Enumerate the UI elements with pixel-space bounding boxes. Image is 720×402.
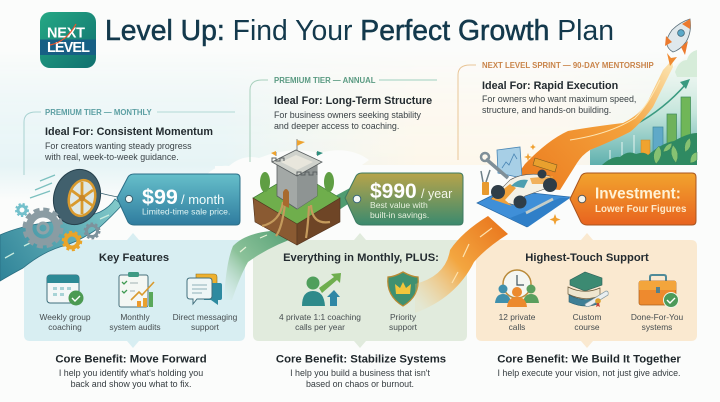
price tag: annual: / year — [421, 187, 452, 201]
icon: shield with crown — [388, 272, 418, 306]
growth scene: bars, arrow, foliage — [590, 48, 697, 165]
icon: castle on land block — [253, 139, 340, 245]
label: private coaching calls: 4 private 1:1 coaching — [279, 312, 361, 322]
icon: rocket — [665, 19, 690, 55]
panel: monthly header: with real, week-to-week guidance. — [44, 152, 179, 162]
icon: clipboard audit chart — [119, 272, 154, 307]
logo — [40, 12, 96, 68]
icon: race car workshop — [477, 144, 570, 227]
road: orange upper — [510, 53, 677, 190]
icon: person with growth arrow — [302, 273, 341, 306]
white cloud behind castle — [205, 150, 697, 182]
icon: briefcase with check — [639, 275, 678, 308]
core benefit: we build it together — [497, 354, 681, 378]
panel: sprint header: Ideal For: Rapid Execution — [482, 80, 618, 92]
panel: monthly header: Ideal For: Consistent Momentum — [45, 126, 213, 138]
core benefit: stabilize systems: I help you build a business that isn't — [290, 368, 430, 378]
icon: gears — [16, 204, 100, 250]
road: orange lower — [415, 216, 508, 313]
price tag: annual: $990 — [370, 180, 417, 203]
core benefit: we build it together: Core Benefit: We Build It Together — [497, 354, 681, 366]
label: custom course: course — [574, 322, 600, 332]
icon: clock with people — [495, 270, 539, 307]
panel: annual header — [250, 76, 437, 162]
panel: annual header: PREMIUM TIER — ANNUAL — [274, 76, 376, 85]
core benefit: stabilize systems: based on chaos or burnout. — [306, 379, 414, 389]
label: private calls: calls — [509, 322, 525, 332]
price tag: annual — [345, 173, 463, 225]
label: monthly system audits: Monthly — [120, 312, 150, 322]
label: monthly system audits: system audits — [109, 322, 161, 332]
core benefit: move forward: I help you identify what's holding you — [59, 368, 203, 378]
label: direct messaging support: Direct messaging — [173, 312, 237, 322]
price tag: investment: Lower Four Figures — [595, 204, 687, 215]
label: private calls: 12 private — [499, 312, 535, 322]
label: done-for-you systems: Done-For-You — [631, 312, 683, 322]
core benefit: stabilize systems — [276, 354, 446, 389]
core benefit: move forward: back and show you what to fix. — [71, 379, 191, 389]
panel: annual header: Ideal For: Long-Term Structure — [274, 95, 432, 107]
panel: annual header: and deeper access to coaching. — [274, 121, 399, 131]
label: priority support: Priority — [390, 312, 416, 322]
panel: highest-touch support — [476, 233, 697, 348]
panel: monthly header — [24, 108, 235, 175]
price tag: annual: built-in savings. — [370, 210, 429, 220]
panel: sprint header: NEXT LEVEL SPRINT — 90-DAY MENTORSHIP — [482, 61, 654, 70]
label: priority support: support — [389, 322, 418, 332]
left wash fade — [0, 166, 215, 200]
panel: key features — [24, 233, 245, 348]
road: green — [224, 188, 354, 300]
label: weekly group coaching: coaching — [48, 322, 82, 332]
panel: sprint header: structure, and hands-on building. — [482, 105, 611, 115]
icon: tire wheel — [30, 163, 126, 231]
price tag: investment — [570, 173, 696, 225]
panel: monthly header: PREMIUM TIER — MONTHLY — [45, 108, 153, 117]
background wash band — [0, 83, 636, 166]
price tag: monthly: Limited-time sale price. — [142, 206, 230, 216]
logo: LEVEL — [47, 40, 90, 56]
panel: everything in monthly plus — [253, 233, 467, 348]
label: private coaching calls: calls per year — [295, 322, 345, 332]
heading: key features: Key Features — [99, 252, 169, 264]
core benefit: we build it together: I help execute your vision, not just give advice. — [497, 368, 681, 378]
price tag: investment: Investment: — [595, 186, 681, 202]
label: direct messaging support: support — [191, 322, 220, 332]
label: custom course: Custom — [573, 312, 601, 322]
price tag: annual: Best value with — [370, 200, 428, 210]
label: done-for-you systems: systems — [642, 322, 672, 332]
price tag: monthly: $99 — [142, 185, 178, 209]
label: weekly group coaching: Weekly group — [39, 312, 91, 322]
heading: everything in monthly plus: Everything in Monthly, PLUS: — [283, 252, 439, 264]
panel: monthly header: For creators wanting steady progress — [45, 141, 192, 151]
heading: highest-touch support: Highest-Touch Support — [525, 252, 649, 264]
panel: sprint header — [458, 61, 654, 160]
panel: annual header: For business owners seeking stability — [274, 110, 422, 120]
logo: NEXT — [47, 26, 85, 42]
core benefit: move forward — [55, 354, 207, 389]
price tag: monthly — [117, 174, 240, 225]
title: Level Up: Find Your Perfect Growth Plan — [105, 15, 614, 47]
icon: calendar — [47, 275, 84, 306]
core benefit: stabilize systems: Core Benefit: Stabilize Systems — [276, 354, 446, 366]
icon: books and diploma — [568, 272, 608, 307]
road: blue — [0, 199, 122, 281]
price tag: monthly: / month — [181, 192, 224, 207]
core benefit: move forward: Core Benefit: Move Forward — [55, 354, 207, 366]
panel: sprint header: For owners who want maximum speed, — [482, 94, 636, 104]
icon: chat bubbles — [187, 274, 222, 305]
